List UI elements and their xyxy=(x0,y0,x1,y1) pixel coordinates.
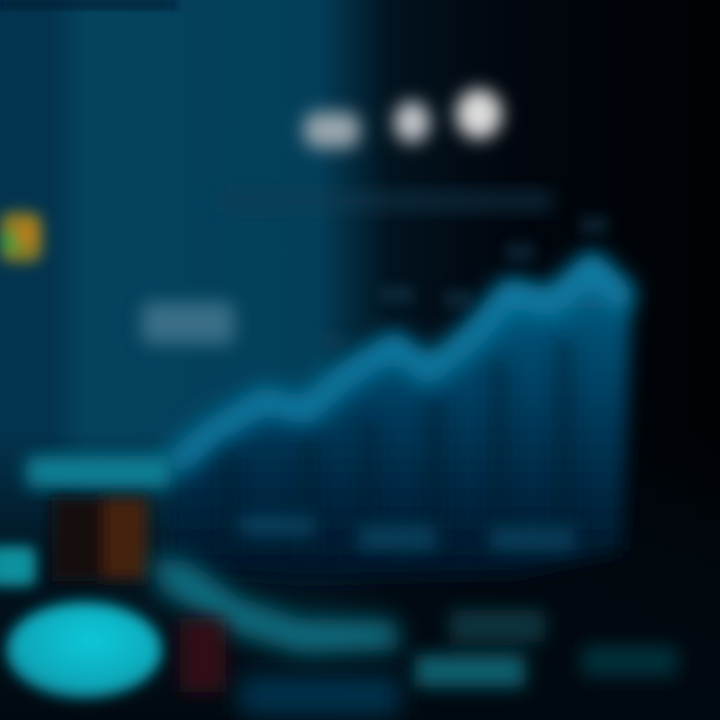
large cyan ellipse xyxy=(6,602,162,698)
area chart xyxy=(170,255,632,580)
teal ribbon xyxy=(150,556,400,654)
teal left stub xyxy=(0,546,36,586)
subtitle text xyxy=(222,190,552,212)
chart crest line xyxy=(170,266,628,468)
bottom blue band xyxy=(240,676,400,716)
bottom right legend blocks xyxy=(415,610,677,687)
dark brown block xyxy=(52,497,148,581)
left value label xyxy=(142,302,234,344)
chart bottom labels xyxy=(240,516,575,550)
dark red block xyxy=(180,618,226,692)
chart column shading xyxy=(222,340,573,560)
chart point labels xyxy=(320,216,608,347)
shelf band xyxy=(26,456,171,488)
heading: three glowing marks xyxy=(304,89,502,148)
icon: green and orange badge xyxy=(0,212,42,262)
